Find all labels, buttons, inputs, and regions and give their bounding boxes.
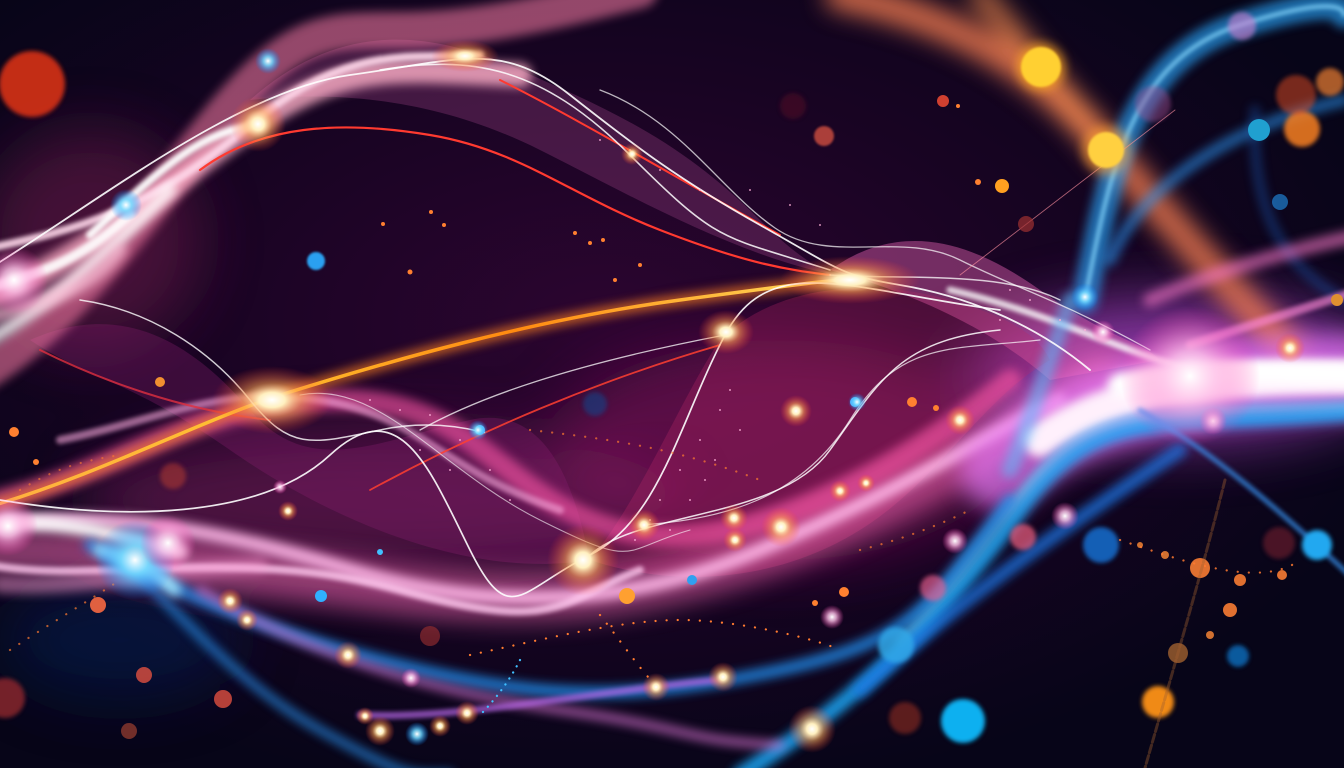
line: orange-yellow bright curve — [0, 280, 860, 505]
ribbon: top-right orange beam — [840, 0, 1290, 350]
dotted trails — [10, 430, 1300, 768]
ambient glow — [0, 130, 1344, 700]
ribbon: top-left pink band — [0, 0, 640, 375]
ribbon: lower-right blue bands — [740, 300, 1344, 768]
lines: thin white curves — [0, 59, 1175, 597]
ribbon: translucent right sheet — [830, 241, 1160, 380]
particles: glitter on sheets — [369, 139, 1086, 541]
ribbon: translucent upper sheet — [250, 40, 870, 280]
light flares — [0, 40, 1260, 600]
ribbon: lower-left pink band — [0, 380, 1100, 611]
ribbon: central translucent sheet — [590, 288, 1050, 577]
ribbon: top-right blue loop — [1085, 6, 1344, 300]
ribbon: right bright white band — [950, 235, 1344, 470]
ribbon: lower blue sweep — [90, 500, 1010, 768]
line: red upper curve — [40, 80, 830, 490]
ribbon: left translucent sheet — [30, 324, 590, 564]
ribbon: mid-left magenta wave — [0, 380, 1010, 536]
